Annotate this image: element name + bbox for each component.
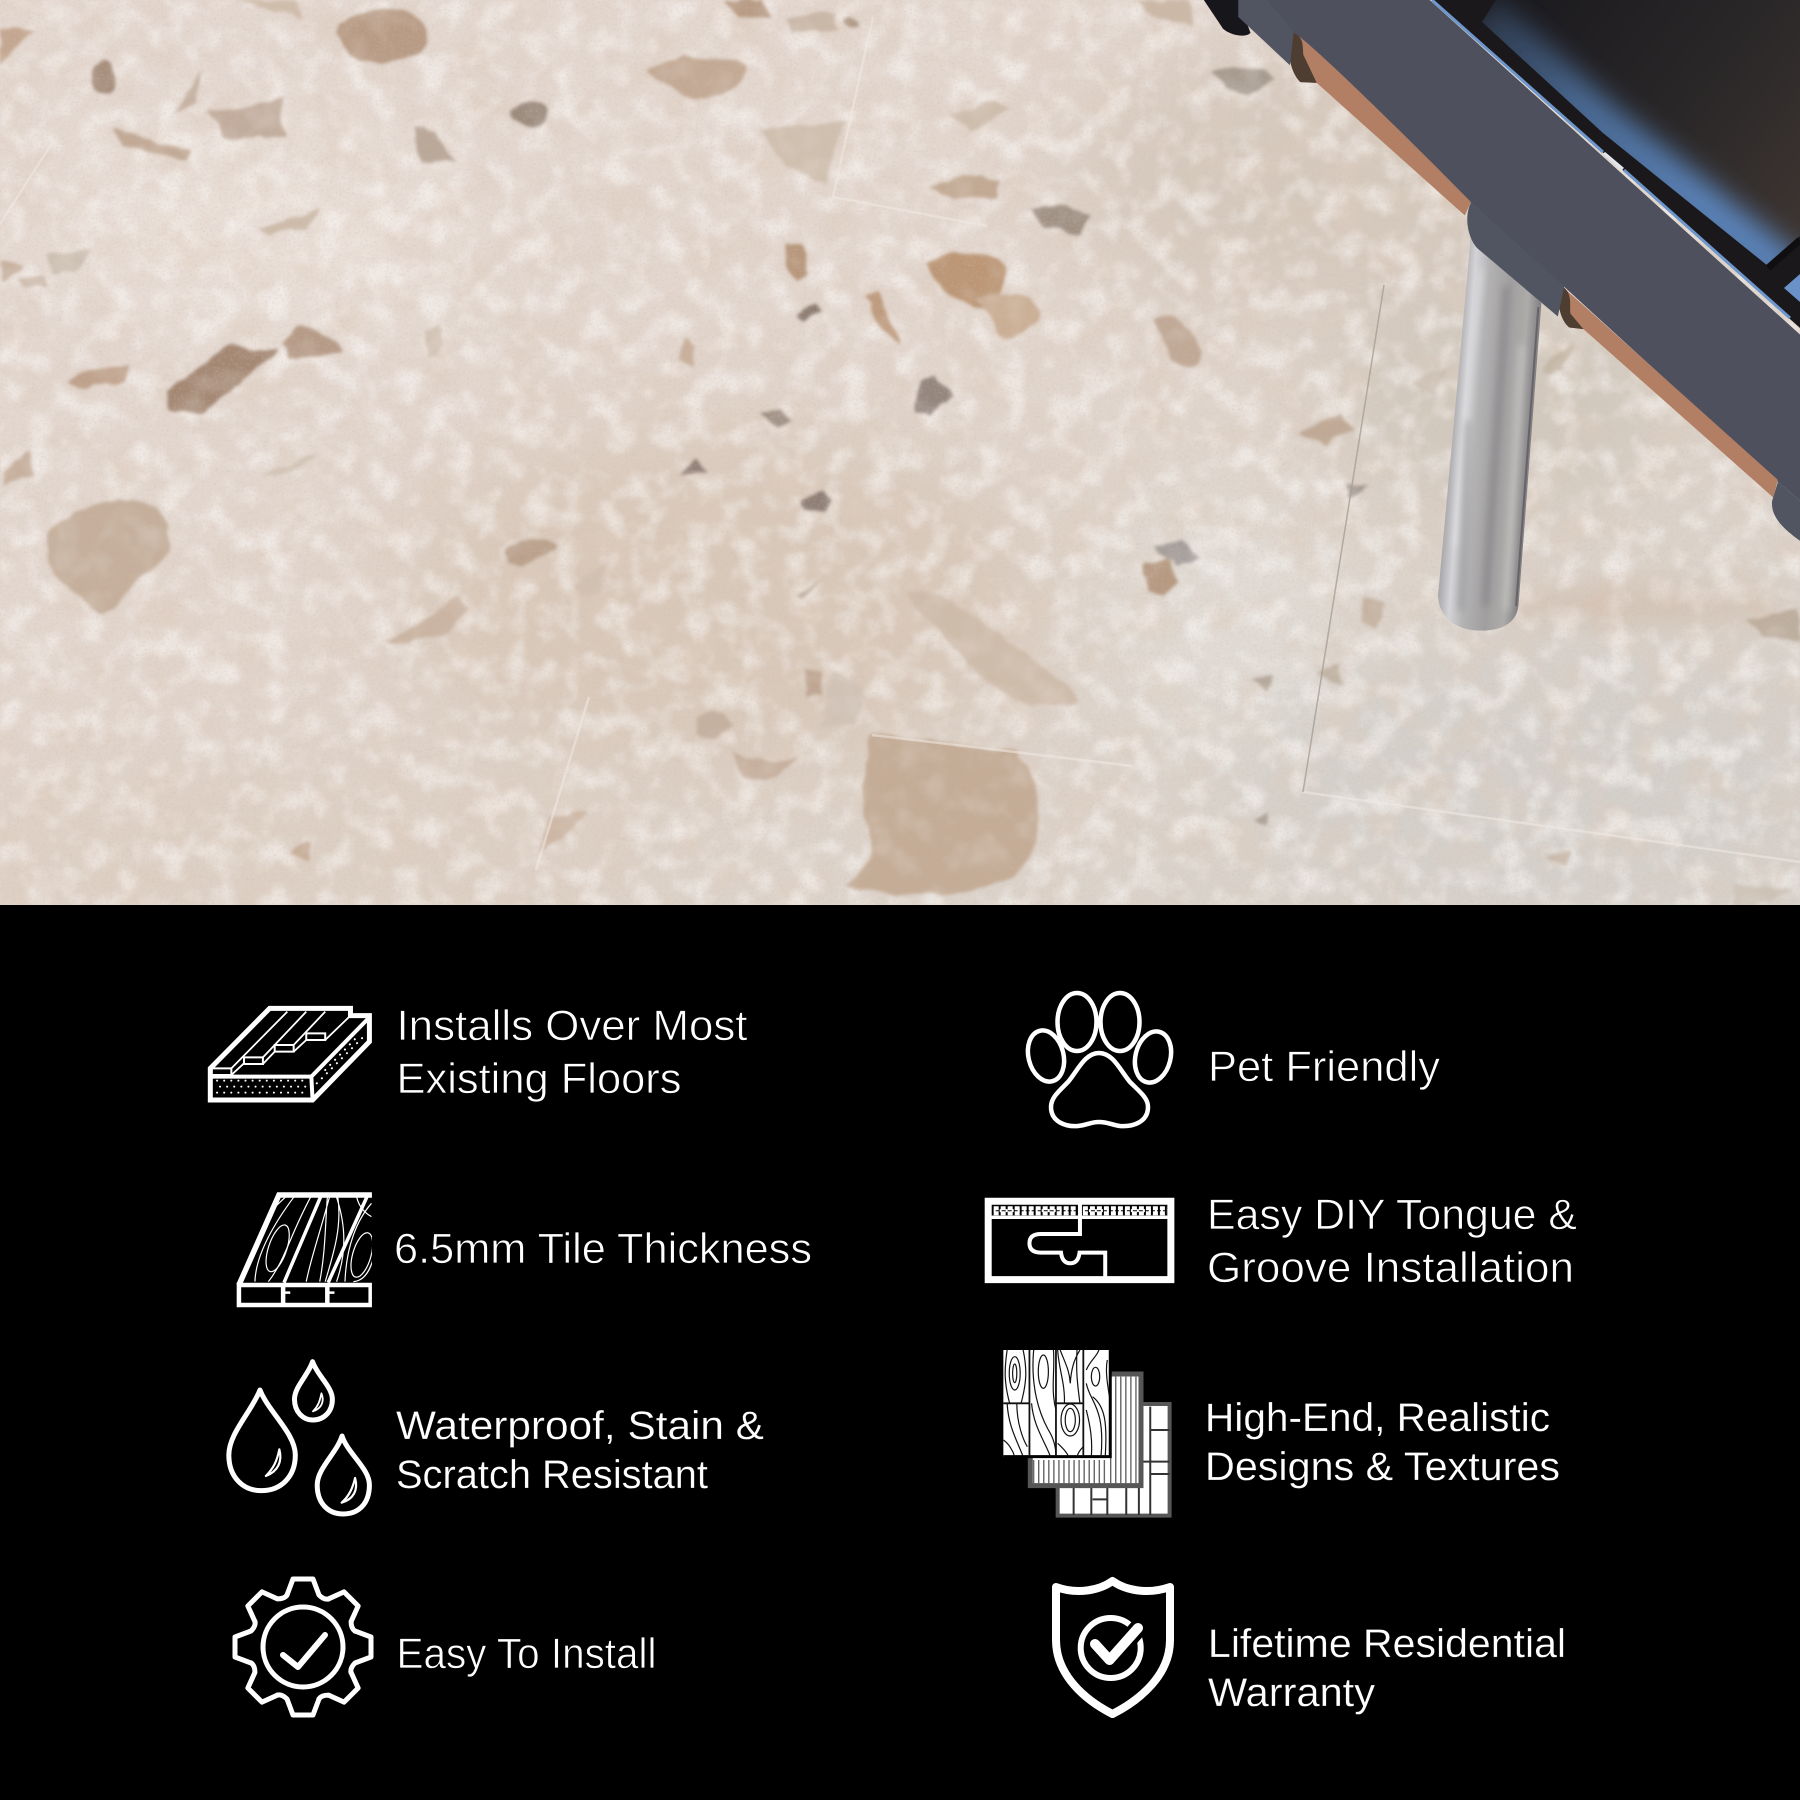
feature: lifetime warranty: [1056, 1581, 1566, 1715]
floor speckle: [0, 0, 1800, 905]
icon: shield with check: [1056, 1581, 1170, 1714]
floor tonal variation: [48, 50, 1648, 882]
feature: tile thickness: [239, 1195, 812, 1305]
panel: features: [210, 993, 1577, 1715]
feature: realistic designs: [1003, 1350, 1560, 1516]
feature: tongue and groove: [988, 1192, 1577, 1292]
photo: terrazzo floor with bench: [0, 0, 1800, 940]
leather straps: [1238, 0, 1800, 541]
black bracket corner: [1204, 0, 1251, 36]
tile seams: [0, 17, 1800, 870]
seat side panel: [1238, 0, 1800, 501]
feature: installs over most existing floors: [210, 1003, 748, 1103]
feature: waterproof: [229, 1362, 764, 1514]
leather cushion: [1470, 0, 1800, 280]
text: realistic designs: High-End, Realistic: [1205, 1396, 1550, 1440]
feature: pet friendly: [1023, 993, 1441, 1126]
text: easy to install: Easy To Install: [396, 1631, 656, 1678]
tuft seam: [1768, 240, 1800, 268]
text: installs over most existing floors: [396, 1003, 748, 1103]
chrome leg: [1438, 236, 1541, 631]
chip mottling: [0, 0, 1800, 905]
icon: tongue and groove joint: [988, 1198, 1171, 1283]
floor mottling light: [0, 0, 1800, 905]
lower cushion corner: [1784, 274, 1800, 302]
text: lifetime warranty: Lifetime Residential: [1208, 1622, 1566, 1666]
text: realistic designs: Designs & Textures: [1205, 1445, 1560, 1489]
text: tongue and groove: Groove Installation: [1207, 1245, 1574, 1292]
icon: gear with check: [235, 1579, 371, 1715]
icon: wood plank tile: [239, 1195, 378, 1305]
text: installs over most existing floors: Existing Floors: [396, 1056, 682, 1103]
text: installs over most existing floors: Installs Over Most: [396, 1003, 748, 1050]
floor base colour: [0, 0, 1800, 905]
text: tongue and groove: [1207, 1192, 1577, 1292]
text: waterproof: [396, 1404, 764, 1497]
bench lower frame: [1204, 0, 1800, 631]
floor mottling dark: [13, 16, 1300, 691]
icon: layered floor slab: [210, 1008, 369, 1100]
swatch: tile: [1058, 1404, 1170, 1516]
text: lifetime warranty: [1208, 1622, 1566, 1715]
swatch: wood grain: [1003, 1350, 1110, 1457]
text: lifetime warranty: Warranty: [1208, 1671, 1375, 1715]
leg shadow: [1490, 585, 1790, 625]
piping highlight: [1432, 0, 1790, 318]
swatch: stripes: [1030, 1374, 1141, 1486]
wood rails: [1289, 32, 1778, 498]
dark seam right: [1303, 285, 1384, 792]
icon: paw print: [1023, 993, 1176, 1126]
icon: water drops: [229, 1362, 369, 1514]
text: waterproof: Waterproof, Stain &: [396, 1404, 764, 1448]
text: tile thickness: 6.5mm Tile Thickness: [394, 1226, 812, 1273]
piping glint: [1604, 153, 1623, 169]
text: realistic designs: [1205, 1396, 1560, 1489]
icon: stacked texture swatches: [1003, 1350, 1170, 1516]
seat seam dark: [1432, 0, 1800, 328]
text: waterproof: Scratch Resistant: [396, 1453, 708, 1497]
bench: [1204, 0, 1800, 631]
text: tongue and groove: Easy DIY Tongue &: [1207, 1192, 1577, 1239]
feature: easy to install: [235, 1579, 656, 1715]
terrazzo chips: [0, 0, 1800, 905]
text: pet friendly: Pet Friendly: [1208, 1044, 1441, 1091]
